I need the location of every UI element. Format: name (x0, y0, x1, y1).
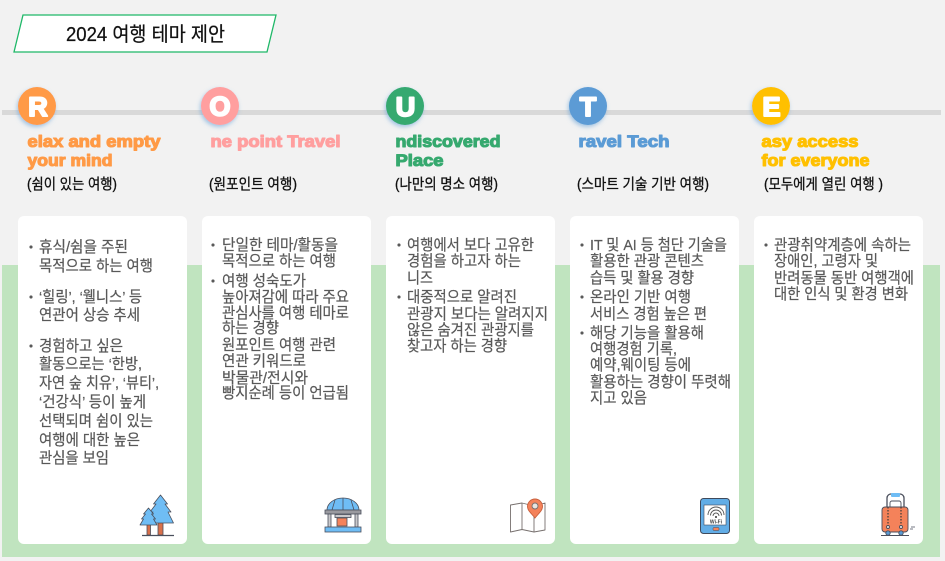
R card bullet text: 관심을 보임 (39, 450, 109, 467)
heading E: asy access (762, 133, 858, 151)
green background band (2, 265, 940, 557)
subheading R: (쉼이 있는 여행) (27, 176, 117, 193)
T card bullet text: 지고 있음 (590, 390, 647, 407)
E card bullet text: 관광취약계층에 속하는 (774, 237, 911, 254)
O card bullet text: 여행 성숙도가 (222, 273, 306, 290)
U card bullet text: 대중적으로 알려진 (407, 289, 517, 306)
panel: O card (202, 216, 371, 544)
panel: E card (754, 216, 923, 544)
T card bullet text: 해당 기능을 활용해 (590, 325, 704, 342)
title (14, 15, 276, 52)
R card bullet text (30, 239, 159, 467)
column U: undiscovered heading (386, 87, 500, 193)
R card bullet text: 여행에 대한 높은 (39, 432, 140, 449)
O card bullet text: 원포인트 여행 관련 (222, 337, 336, 354)
O card bullet text: 목적으로 하는 여행 (222, 253, 336, 270)
heading T: ravel Tech (578, 133, 670, 151)
column O: one point heading (201, 87, 340, 193)
U card bullet text: 관광지 보다는 알려지지 (407, 306, 548, 323)
T card bullet text: IT 및 AI 등 첨단 기술을 (590, 237, 727, 254)
panel: U card (386, 216, 555, 544)
badge R (18, 87, 56, 125)
T card bullet text: 서비스 경험 높은 편 (590, 306, 707, 323)
T card bullet text: 온라인 기반 여행 (590, 289, 691, 306)
R card bullet text: 목적으로 하는 여행 (39, 258, 153, 275)
R card bullet text: ‘건강식’ 등이 높게 (39, 394, 146, 411)
E card bullet text (764, 237, 914, 303)
O card bullet text: 높아져감에 따라 주요 (222, 289, 349, 306)
U card bullet text: 경험을 하고자 하는 (407, 253, 521, 270)
heading R: elax and empty (28, 133, 161, 151)
O card bullet text: 빵지순례 등이 언급됨 (222, 385, 349, 402)
E card bullet text: 장애인, 고령자 및 (774, 253, 878, 270)
E card bullet text: 반려동물 동반 여행객에 (774, 270, 914, 287)
O card bullet text: 연관 키워드로 (222, 353, 306, 370)
column T: travel tech heading (569, 87, 709, 193)
R card bullet text: 경험하고 싶은 (39, 338, 123, 355)
title: 2024 여행 테마 제안 (66, 23, 225, 46)
heading O: ne point Travel (210, 133, 340, 151)
U card bullet text: 않은 숨겨진 관광지를 (407, 322, 534, 339)
panel: R card (18, 216, 187, 544)
R card bullet text: 휴식/쉼을 주된 (39, 239, 128, 256)
badge O: O (209, 92, 231, 122)
heading E (762, 133, 870, 170)
badge R: R (28, 92, 48, 122)
T card bullet text: 예약,웨이팅 등에 (590, 357, 691, 374)
badge T: T (580, 92, 597, 122)
icon: wi-fi tablet (700, 498, 730, 534)
icon: suitcase (881, 493, 915, 536)
E card bullet text: 대한 인식 및 환경 변화 (774, 286, 908, 303)
heading R: your mind (28, 152, 112, 170)
column E: easy access heading (752, 87, 883, 193)
heading E: for everyone (762, 152, 870, 170)
U card bullet text: 니즈 (407, 270, 433, 287)
T card bullet text: 습득 및 활용 경향 (590, 270, 694, 287)
heading U: Place (396, 152, 444, 170)
O card bullet text: 하는 경향 (222, 320, 279, 337)
subheading O: (원포인트 여행) (209, 176, 297, 193)
subheading T: (스마트 기술 기반 여행) (577, 176, 709, 193)
T card bullet text: 활용한 관광 콘텐츠 (590, 253, 704, 270)
R card bullet text: 자연 숲 치유’, ‘뷰티’, (39, 375, 159, 392)
T card bullet text (580, 237, 731, 407)
T card bullet text: 활용하는 경향이 뚜렷해 (590, 374, 731, 391)
heading U (396, 133, 500, 170)
R card bullet text: ‘힐링’, ‘웰니스’ 등 (39, 289, 142, 306)
U card bullet text: 여행에서 보다 고유한 (407, 237, 534, 254)
U card bullet text (398, 237, 548, 355)
panel: T card (570, 216, 739, 544)
subheading E: (모두에게 열린 여행 ) (764, 176, 883, 193)
badge E: E (762, 92, 781, 122)
U card bullet text: 찾고자 하는 경향 (407, 338, 507, 355)
R card bullet text: 연관어 상승 추세 (39, 307, 140, 324)
R card bullet text: 활동으로는 ‘한방, (39, 356, 142, 373)
icon: museum (325, 498, 361, 532)
icon: trees (140, 495, 174, 536)
heading U: ndiscovered (396, 133, 500, 151)
subheading U: (나만의 명소 여행) (395, 176, 498, 193)
O card bullet text: 박물관/전시와 (222, 370, 308, 387)
badge U: U (396, 92, 415, 122)
icon: map with pin (510, 499, 545, 532)
O card bullet text (212, 237, 349, 402)
heading R (28, 133, 161, 170)
O card bullet text: 단일한 테마/활동을 (222, 237, 338, 254)
column R: relax heading (18, 87, 161, 193)
T card bullet text: 여행경험 기록, (590, 341, 677, 358)
R card bullet text: 선택되며 쉼이 있는 (39, 413, 153, 430)
O card bullet text: 관심사를 여행 테마로 (222, 305, 349, 322)
timeline bar (2, 110, 941, 115)
icon: wi-fi tablet: Wi-Fi (710, 520, 723, 526)
